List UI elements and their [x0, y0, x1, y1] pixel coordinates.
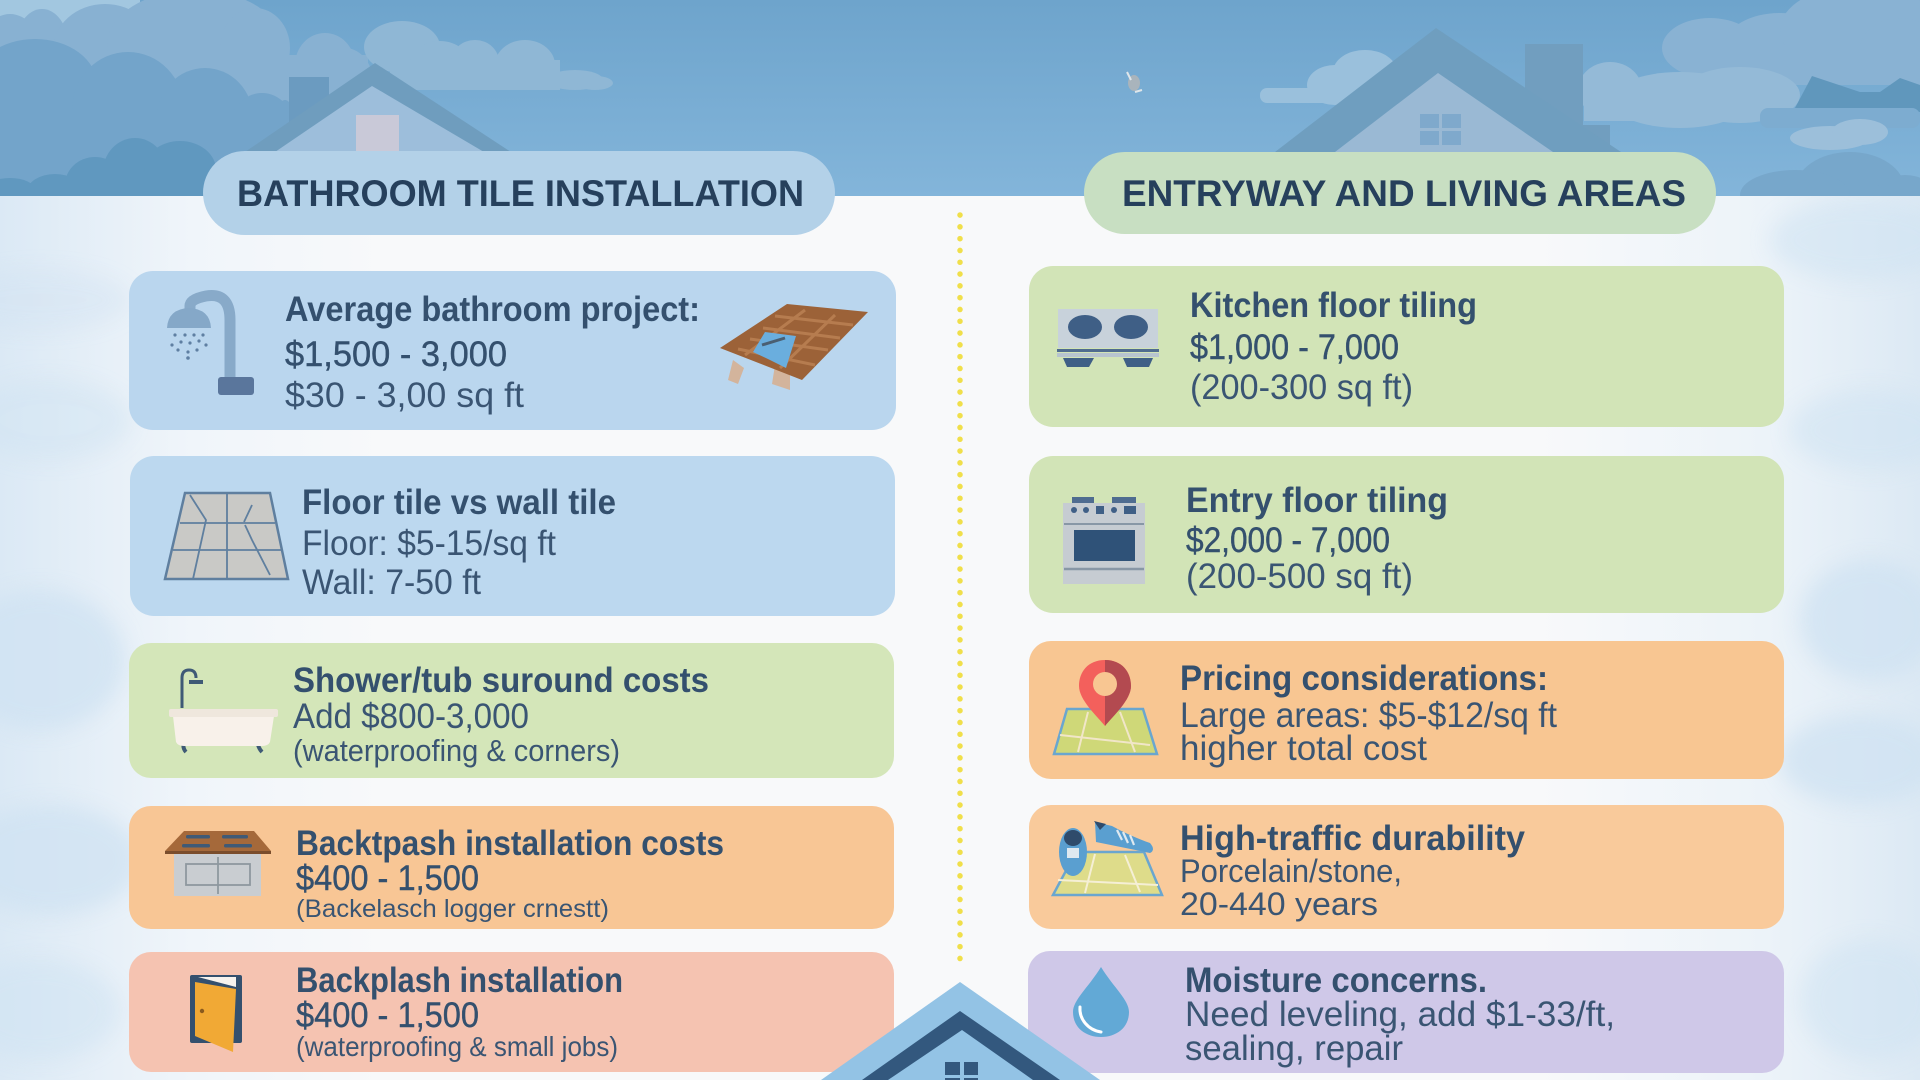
- text: high-traffic durability: High-traffic durability: [1180, 819, 1526, 858]
- text: pricing considerations: [1180, 659, 1557, 768]
- heading pill: entryway and living areas: ENTRYWAY AND LIVING AREAS: [1122, 173, 1686, 214]
- icon: oven: [1063, 497, 1145, 584]
- icon: house at bottom center: [821, 982, 1100, 1080]
- icon: counter with cooktop: [165, 831, 271, 896]
- text: moisture concerns: Need leveling, add $1-33/ft,: [1185, 995, 1615, 1034]
- text: moisture concerns: sealing, repair: [1185, 1029, 1403, 1068]
- background clouds: right: [1260, 0, 1920, 196]
- text: moisture concerns: [1185, 961, 1615, 1068]
- text: average bathroom project: Average bathroom project:: [285, 290, 700, 329]
- panel: average bathroom project: [129, 271, 896, 430]
- text: shower/tub surround costs: [293, 661, 709, 768]
- panel: entry floor tiling: [1029, 456, 1784, 613]
- text: backsplash installation: $400 - 1,500: [296, 996, 479, 1035]
- text: shower/tub surround costs: (waterproofing & corners): [293, 733, 620, 768]
- text: backsplash installation costs: Backtpash installation costs: [296, 824, 724, 863]
- text: average bathroom project: $1,500 - 3,000: [285, 335, 507, 374]
- text: floor tile vs wall tile: Floor tile vs wall tile: [302, 483, 616, 522]
- panel: floor tile vs wall tile: [130, 456, 895, 616]
- icon: open door: [190, 975, 242, 1052]
- heading pill: bathroom tile installation: BATHROOM TILE INSTALLATION: [237, 173, 804, 214]
- text: average bathroom project: [285, 290, 700, 415]
- text: pricing considerations: higher total cost: [1180, 729, 1427, 768]
- icon: shoes on map: [1053, 821, 1162, 895]
- text: high-traffic durability: 20-440 years: [1180, 886, 1378, 922]
- text: backsplash installation costs: [296, 824, 724, 923]
- center divider: yellow dotted line: [957, 215, 963, 968]
- panel: backsplash installation costs: [129, 806, 894, 929]
- icon: map pin: [1054, 660, 1157, 754]
- text: entry floor tiling: (200-500 sq ft): [1186, 557, 1413, 596]
- text: kitchen floor tiling: Kitchen floor tiling: [1190, 286, 1477, 325]
- text: kitchen floor tiling: $1,000 - 7,000: [1190, 328, 1399, 367]
- text: floor tile vs wall tile: Wall: 7-50 ft: [302, 563, 481, 602]
- text: pricing considerations: Pricing considerations:: [1180, 659, 1548, 698]
- heading pill: entryway and living areas: [1084, 152, 1716, 234]
- icon: shower: [167, 296, 254, 395]
- icon: roof tile sheet: [720, 304, 868, 390]
- text: backsplash installation: [296, 961, 623, 1062]
- panel: backsplash installation: [129, 952, 894, 1072]
- text: backsplash installation: Backplash installation: [296, 961, 623, 1000]
- panel: shower/tub surround costs: [129, 643, 894, 778]
- icon: water drop: [1073, 967, 1129, 1037]
- background house: right: [1275, 28, 1621, 155]
- text: moisture concerns: Moisture concerns.: [1185, 961, 1487, 1000]
- sky band with clouds: [0, 0, 1920, 196]
- icon: cracked tile floor: [165, 493, 288, 579]
- text: backsplash installation costs: $400 - 1,500: [296, 859, 479, 898]
- icon: bathtub: [169, 670, 278, 752]
- bird: [1127, 72, 1142, 92]
- text: kitchen floor tiling: [1190, 286, 1477, 407]
- text: shower/tub surround costs: Shower/tub suround costs: [293, 661, 709, 700]
- text: entry floor tiling: $2,000 - 7,000: [1186, 521, 1390, 560]
- panel: kitchen floor tiling: [1029, 266, 1784, 427]
- text: entry floor tiling: Entry floor tiling: [1186, 481, 1448, 520]
- icon: cooktop: [1057, 309, 1159, 367]
- heading pill: bathroom tile installation: [203, 151, 835, 235]
- text: pricing considerations: Large areas: $5-$12/sq ft: [1180, 696, 1557, 735]
- text: backsplash installation costs: (Backelasch logger crnestt): [296, 895, 609, 923]
- text: shower/tub surround costs: Add $800-3,000: [293, 697, 529, 736]
- text: entry floor tiling: [1186, 481, 1448, 596]
- background house: left: [245, 63, 511, 152]
- text: high-traffic durability: [1180, 819, 1526, 922]
- text: high-traffic durability: Porcelain/stone,: [1180, 853, 1402, 889]
- text: floor tile vs wall tile: [302, 483, 616, 602]
- panel: pricing considerations: [1029, 641, 1784, 779]
- text: floor tile vs wall tile: Floor: $5-15/sq ft: [302, 524, 556, 563]
- panel: moisture concerns: [1028, 951, 1784, 1073]
- text: backsplash installation: (waterproofing & small jobs): [296, 1031, 618, 1062]
- panel: high-traffic durability: [1029, 805, 1784, 929]
- text: kitchen floor tiling: (200-300 sq ft): [1190, 368, 1413, 407]
- text: average bathroom project: $30 - 3,00 sq ft: [285, 376, 524, 415]
